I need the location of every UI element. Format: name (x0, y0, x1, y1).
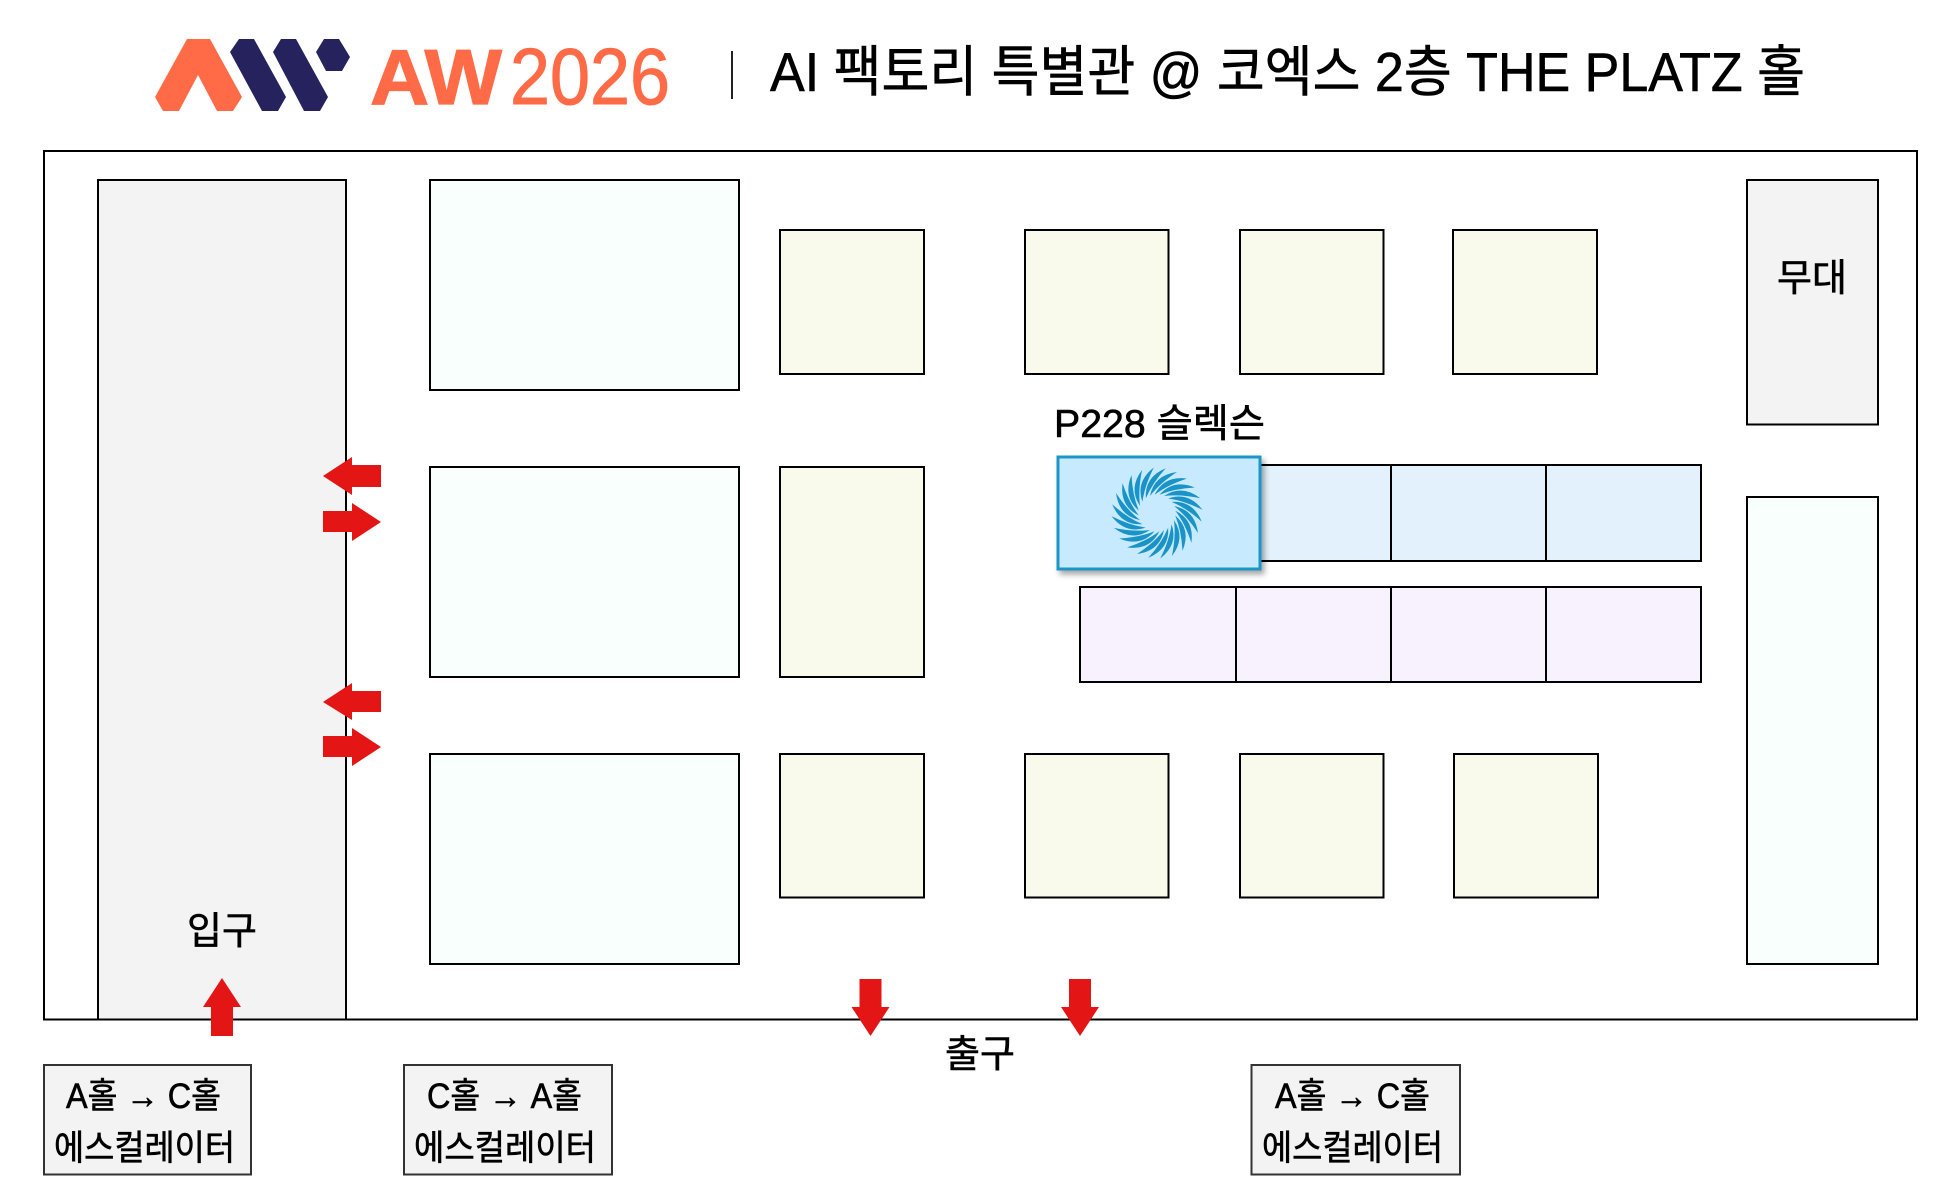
escalator box 1 (44, 1065, 251, 1174)
escalator box 1: 에스컬레이터 (54, 1129, 235, 1168)
escalator box 2 (404, 1065, 612, 1174)
escalator box 2: C홀 → A홀 (427, 1077, 582, 1116)
blue booth row (1236, 465, 1701, 561)
highlighted booth P228 (1058, 457, 1260, 569)
escalator box 3 (1252, 1065, 1460, 1174)
booth label: P228: P228 슬렉슨 (1054, 403, 1265, 446)
cream tall booth (780, 467, 924, 677)
arrow: right lower 2 (323, 728, 381, 766)
icon: spiral logo (1111, 467, 1203, 559)
purple booth row (1080, 587, 1701, 682)
arrow: left lower 2 (323, 683, 381, 720)
right mint booth (1747, 497, 1878, 964)
escalator box 1: A홀 → C홀 (66, 1077, 221, 1116)
logo mark (155, 39, 350, 111)
title: AI 팩토리 특별관 @ 코엑스 2층 THE PLATZ 홀 (770, 41, 1805, 103)
stage label: 무대 (1777, 258, 1847, 300)
floor plan outline (44, 151, 1917, 1020)
logo text AW: AW (370, 33, 502, 121)
exit label: 출구 (945, 1034, 1015, 1076)
cream booths bottom row (780, 754, 1598, 898)
large mint booths (430, 180, 739, 964)
cream booths top row (780, 230, 1597, 374)
logo text 2026: 2026 (510, 32, 670, 121)
arrow: exit down 1 (852, 979, 890, 1036)
escalator box 3: 에스컬레이터 (1262, 1129, 1443, 1168)
arrow: right upper 1 (323, 503, 381, 541)
header: logo and title (155, 32, 1805, 121)
arrow: left upper 1 (323, 457, 381, 495)
entrance label: 입구 (187, 911, 257, 953)
arrow: entrance up (203, 978, 241, 1036)
escalator box 2: 에스컬레이터 (414, 1129, 596, 1168)
escalator box 3: A홀 → C홀 (1275, 1077, 1430, 1116)
header divider (731, 51, 733, 99)
stage (1747, 180, 1878, 424)
arrow: exit down 2 (1061, 979, 1099, 1036)
entrance zone (98, 180, 346, 1020)
